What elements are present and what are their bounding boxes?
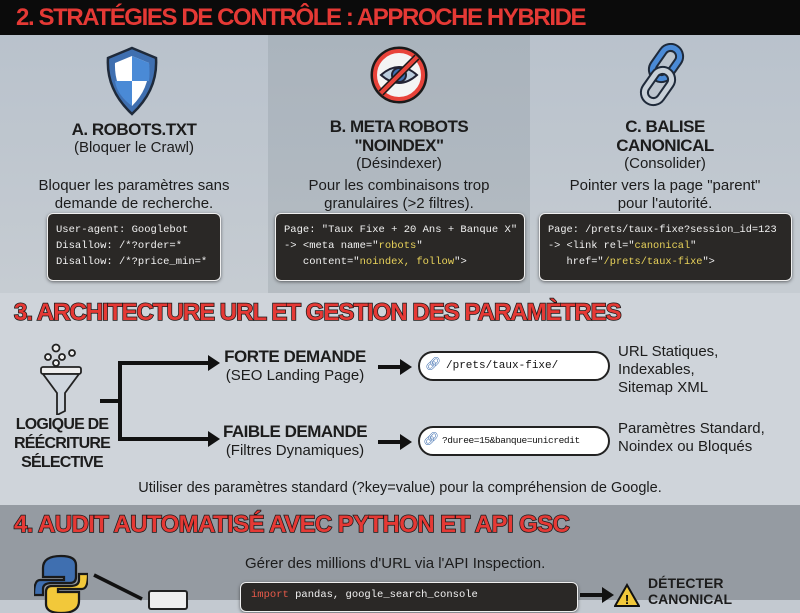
pill: params url — [418, 426, 610, 456]
section 4 background — [0, 505, 800, 600]
arrow: branch — [100, 355, 220, 447]
panel: robots.txt — [39, 46, 229, 284]
text: static result: URL Statiques, — [618, 343, 718, 360]
heading: B. META ROBOTS — [330, 117, 468, 136]
panel: meta robots: (Désindexer) — [356, 155, 442, 172]
section 4 title: 4. AUDIT AUTOMATISÉ AVEC PYTHON ET API GSC — [14, 511, 569, 538]
code box: Page: /prets/taux-fixe?session_id=123 -> <link rel="canonical" href="/prets/taux-fixe"> — [548, 224, 777, 268]
arrow: forte — [378, 359, 412, 375]
text: Pour les combinaisons trop — [309, 177, 489, 194]
note: Utiliser des paramètres standard (?key=value) pour la compréhension de Google. — [138, 480, 662, 496]
header bar — [0, 0, 800, 35]
code box — [275, 213, 525, 281]
panel: canonical — [536, 43, 794, 284]
pill: static url: /prets/taux-fixe/ — [446, 360, 558, 372]
code box — [47, 213, 221, 281]
heading: "NOINDEX" — [354, 136, 444, 155]
text: detecter — [648, 575, 732, 607]
text: granulaires (>2 filtres). — [324, 195, 474, 212]
text: static result — [618, 343, 718, 396]
icon: warning: ! — [625, 592, 629, 607]
text: Bloquer les paramètres sans — [39, 177, 229, 194]
pill: static url — [418, 351, 610, 381]
section 2 background — [0, 35, 800, 293]
text: forte demande: FORTE DEMANDE — [224, 347, 366, 366]
icon: chain link — [640, 43, 684, 106]
heading: A. ROBOTS.TXT — [72, 120, 196, 139]
section 3 background — [0, 293, 800, 505]
panel: canonical: (Consolider) — [624, 155, 706, 172]
text: faible demande: FAIBLE DEMANDE — [223, 422, 367, 441]
code box: import pandas, google_search_console — [251, 589, 478, 601]
text: Pointer vers la page "parent" — [570, 177, 760, 194]
code box — [240, 582, 578, 612]
heading — [616, 117, 714, 155]
text: faible demande: (Filtres Dynamiques) — [226, 442, 364, 459]
section 3 title: 3. ARCHITECTURE URL ET GESTION DES PARAMÈTRES — [14, 299, 621, 326]
label: logique: LOGIQUE DE — [16, 416, 108, 433]
code box — [539, 213, 792, 281]
panel: meta robots — [273, 46, 527, 284]
text: static result: Sitemap XML — [618, 379, 708, 396]
icon: python — [34, 554, 88, 613]
icon: funnel — [40, 344, 82, 415]
arrow: to warning — [580, 587, 614, 603]
heading: CANONICAL — [616, 136, 714, 155]
text: pour l'autorité. — [618, 195, 712, 212]
icon: document — [148, 590, 188, 610]
text: forte demande: (SEO Landing Page) — [226, 367, 364, 384]
icon: shield — [106, 46, 158, 116]
text — [39, 177, 229, 212]
text: demande de recherche. — [55, 195, 213, 212]
label: logique: RÉÉCRITURE — [14, 435, 110, 452]
text: params result: Noindex ou Bloqués — [618, 438, 752, 455]
text — [570, 177, 760, 212]
text: faible demande — [223, 422, 367, 459]
icon: warning — [614, 583, 640, 607]
text: inspection: Gérer des millions d'URL via l'API Inspection. — [245, 555, 545, 572]
icon: link forte: 🔗︎ — [425, 356, 442, 371]
text: detecter: DÉTECTER — [648, 575, 723, 591]
heading: C. BALISE — [625, 117, 705, 136]
text: detecter: CANONICAL — [648, 591, 732, 607]
text: params result: Paramètres Standard, — [618, 420, 765, 437]
label: logique — [14, 416, 110, 471]
code box: Page: "Taux Fixe + 20 Ans + Banque X" -> <meta name="robots" content="noindex, follow"> — [284, 224, 517, 268]
label: logique: SÉLECTIVE — [21, 454, 103, 471]
title: 2. STRATÉGIES DE CONTRÔLE : APPROCHE HYBRIDE — [16, 4, 585, 31]
middle column shade — [268, 35, 530, 293]
text: forte demande — [224, 347, 366, 384]
arrow: python — [93, 573, 143, 601]
pill: params url: ?duree=15&banque=unicredit — [442, 435, 580, 446]
text: static result: Indexables, — [618, 361, 695, 378]
text — [309, 177, 489, 212]
heading — [330, 117, 468, 155]
text: params result — [618, 420, 765, 455]
panel: robots.txt: (Bloquer le Crawl) — [74, 139, 194, 156]
icon: link faible: 🔗︎ — [423, 431, 440, 446]
icon: no eye — [370, 46, 428, 104]
code box: User-agent: Googlebot Disallow: /*?order=* Disallow: /*?price_min=* — [56, 224, 207, 268]
arrow: faible — [378, 434, 412, 450]
